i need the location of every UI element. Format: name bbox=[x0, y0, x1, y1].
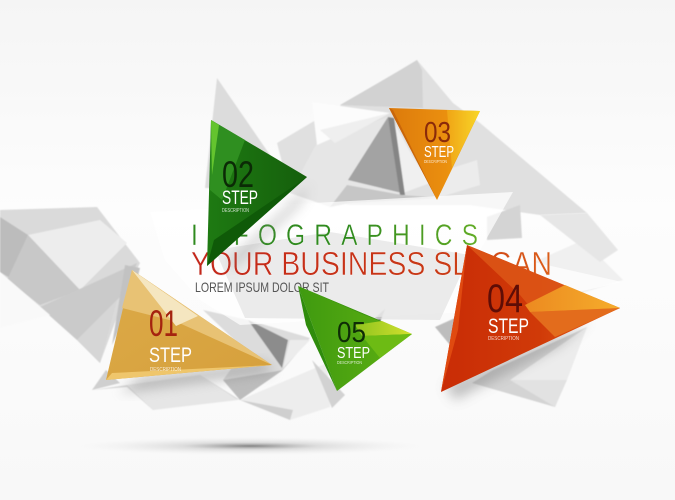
label 05 bbox=[337, 317, 370, 365]
label 04 bbox=[487, 277, 529, 342]
label 03: DESCRIPTION bbox=[424, 159, 447, 164]
label 04: STEP bbox=[488, 315, 529, 338]
label 02 bbox=[222, 154, 258, 214]
title: infographics: INFOGRAPHICS bbox=[191, 218, 478, 252]
label 02: STEP bbox=[222, 188, 258, 209]
label 02: 02 bbox=[222, 154, 254, 195]
label 05: STEP bbox=[337, 345, 370, 362]
label 01 bbox=[149, 303, 192, 373]
grey polygon shards: upper cluster bbox=[205, 60, 587, 240]
label 05: DESCRIPTION bbox=[337, 360, 362, 365]
floor shadow bbox=[80, 437, 420, 455]
white band behind title bbox=[150, 192, 622, 325]
label 02: DESCRIPTION bbox=[222, 208, 249, 214]
subtitle: your business slogan: YOUR BUSINESS SLOGAN bbox=[191, 245, 552, 282]
label 04: 04 bbox=[487, 277, 523, 321]
label 03: STEP bbox=[424, 144, 454, 161]
label 01: STEP bbox=[149, 344, 192, 367]
grey polygon shards: lower middle cluster bbox=[92, 310, 345, 420]
triangle step 05 bbox=[298, 286, 412, 391]
triangle step 02 bbox=[207, 120, 310, 270]
triangle step 01 bbox=[106, 270, 275, 392]
label 03: 03 bbox=[424, 117, 451, 149]
label 01: 01 bbox=[149, 303, 178, 344]
grey polygon shards: left cluster bbox=[0, 207, 140, 390]
label 03 bbox=[424, 117, 454, 164]
tagline: LOREM IPSUM DOLOR SIT bbox=[195, 279, 329, 295]
grey band behind subtitle bbox=[215, 232, 470, 320]
label 01: DESCRIPTION bbox=[150, 367, 181, 373]
grey polygon shards: right cluster bbox=[375, 213, 623, 407]
triangle step 03 bbox=[389, 108, 480, 200]
label 05: 05 bbox=[337, 317, 366, 349]
triangle step 04 bbox=[441, 245, 620, 400]
label 04: DESCRIPTION bbox=[488, 336, 519, 342]
